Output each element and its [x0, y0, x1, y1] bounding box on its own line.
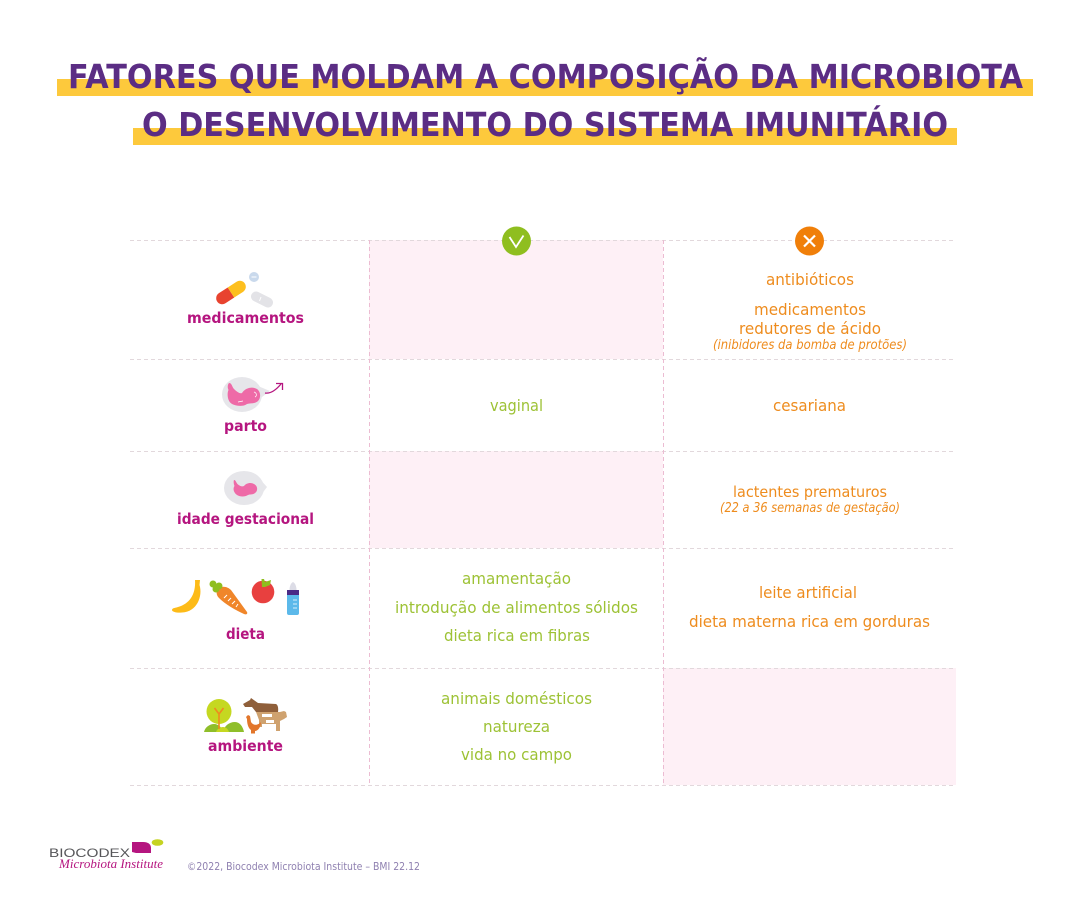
icon: apple [252, 579, 274, 603]
icon: small fetus [224, 471, 267, 505]
text: ambiente positive factors: vida no campo [461, 745, 572, 764]
row: medicamentos [187, 270, 907, 353]
icon: farm animals [243, 698, 287, 734]
icon: positive check [502, 226, 531, 256]
text: lactentes prematuros: lactentes prematuros [733, 483, 887, 501]
icon: carrot [210, 580, 247, 614]
label: medicamentos: medicamentos [187, 309, 304, 327]
text: ambiente positive factors [441, 689, 592, 764]
text: lactentes prematuros: (22 a 36 semanas de gestação) [720, 501, 900, 516]
cow white patches [262, 714, 274, 723]
text: medicamentos redutores de ácido: medicamentos [754, 300, 866, 319]
text: medicamentos redutores de ácido [713, 300, 907, 353]
row: idade gestacional [177, 471, 900, 528]
icon: baby bottle [287, 582, 299, 615]
title: O DESENVOLVIMENTO DO SISTEMA IMUNITÁRIO [142, 104, 948, 144]
icon: pills [214, 272, 268, 307]
label: idade gestacional: idade gestacional [177, 510, 314, 528]
icon: horse [243, 698, 278, 712]
text: ambiente positive factors: natureza [483, 717, 550, 736]
text: medicamentos redutores de ácido: (inibidores da bomba de protões) [713, 338, 907, 353]
icon: banana [172, 580, 200, 613]
icon: cow [256, 711, 287, 731]
text: antibióticos: antibióticos [766, 270, 854, 289]
row: dieta [172, 569, 930, 645]
empty cell: medicamentos positive [369, 240, 663, 359]
title: FATORES QUE MOLDAM A COMPOSIÇÃO DA MICROBIOTA [68, 56, 1023, 96]
logo: Biocodex Microbiota Institute: BIOCODEX [49, 848, 130, 860]
text: dieta positive factors: amamentação [462, 569, 571, 588]
text: cesariana: cesariana [773, 396, 846, 415]
icon: rooster [246, 715, 261, 734]
text: ambiente positive factors: animais domésticos [441, 689, 592, 708]
label: ambiente: ambiente [208, 737, 283, 755]
text: dieta positive factors [395, 569, 638, 645]
icon: fetus with arrow [222, 377, 282, 412]
text: dieta positive factors: introdução de alimentos sólidos [395, 598, 638, 617]
text: lactentes prematuros [720, 483, 900, 516]
text: dieta positive factors: dieta rica em fibras [444, 626, 590, 645]
label: dieta: dieta [226, 625, 265, 643]
text: dieta negative factors [689, 583, 930, 631]
text: dieta negative factors: dieta materna rica em gorduras [689, 612, 930, 631]
text: medicamentos redutores de ácido: redutores de ácido [739, 319, 881, 338]
logo: Biocodex Microbiota Institute: Microbiota Institute [58, 856, 163, 871]
footer credit: ©2022, Biocodex Microbiota Institute – BMI 22.12 [187, 861, 420, 873]
icon: negative cross [795, 226, 824, 256]
title [57, 56, 1033, 145]
empty cell: idade gestacional positive [369, 451, 663, 548]
row: parto [222, 377, 846, 435]
table [130, 240, 956, 786]
icon: tree [204, 699, 244, 732]
text: dieta negative factors: leite artificial [759, 583, 857, 602]
empty cell: ambiente negative [663, 668, 956, 785]
row: ambiente [204, 689, 592, 764]
logo: Biocodex Microbiota Institute [49, 839, 163, 871]
label: parto: parto [224, 417, 267, 435]
text: vaginal: vaginal [490, 396, 543, 415]
